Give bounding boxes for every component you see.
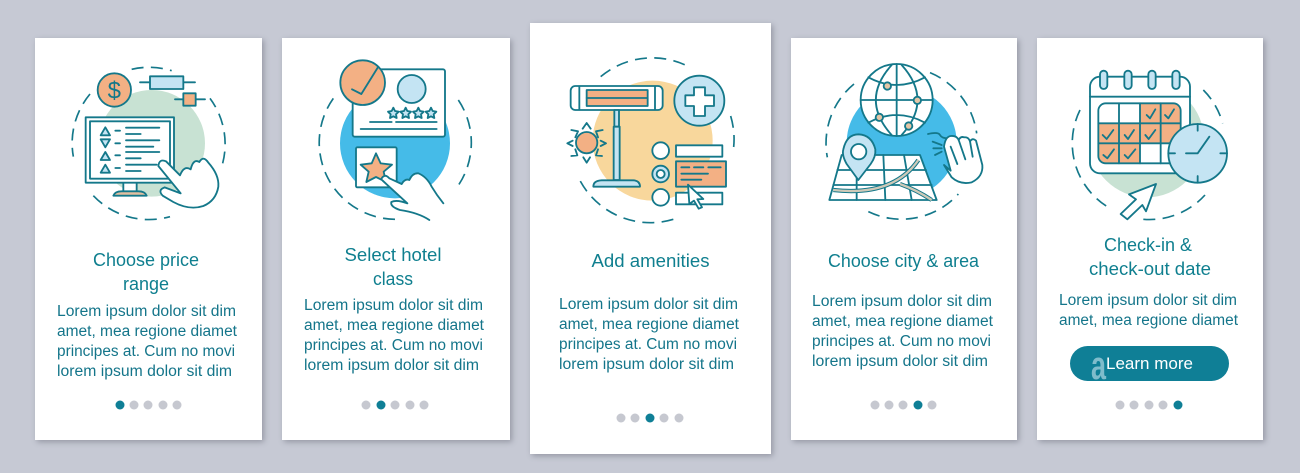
button: learn more: Learn more [1106, 354, 1193, 373]
heading: choose price range [93, 249, 199, 294]
text block: amet, mea regione diamet [1059, 312, 1239, 329]
text block: amet, mea regione diamet [57, 323, 238, 340]
icon: location pin [843, 134, 875, 180]
icon: price range monitor [72, 67, 225, 220]
text block: lorem ipsum dolor sit dim [812, 353, 988, 370]
icon: price range monitor: $ [108, 77, 121, 104]
icon: hand on mouse [928, 133, 982, 183]
pagination dots [870, 400, 936, 410]
text block: amet, mea regione diamet [812, 313, 994, 330]
text block: Lorem ipsum dolor sit dim [57, 303, 236, 320]
heading: check-in and check-out date [1089, 234, 1211, 279]
icon: globe and map [826, 64, 982, 219]
text block [812, 293, 994, 370]
heading: add amenities: Add amenities [592, 250, 710, 271]
text block [1059, 292, 1239, 329]
heading: choose price range: Choose price [93, 249, 199, 270]
text block: amet, mea regione diamet [559, 316, 740, 333]
map [829, 155, 937, 200]
panel: choose city and area [791, 38, 1017, 440]
icon: calendar and clock [1072, 71, 1227, 220]
pagination dots [616, 414, 684, 422]
calendar [1090, 71, 1190, 173]
icon: pointing hand [382, 173, 443, 221]
text block: lorem ipsum dolor sit dim [559, 356, 734, 373]
panel: add amenities [530, 23, 771, 454]
icon: cursor [688, 185, 703, 209]
text block: Lorem ipsum dolor sit dim [1059, 292, 1237, 309]
text block: principes at. Cum no movi [812, 333, 991, 350]
clock [1168, 124, 1227, 183]
icon: sun [567, 123, 606, 163]
text block [304, 297, 485, 374]
text block: lorem ipsum dolor sit dim [304, 357, 479, 374]
icon: hotel rating card [319, 60, 471, 221]
panel: choose price range [35, 38, 262, 440]
heading: select hotel class: Select hotel [344, 244, 442, 265]
pagination dots [1116, 400, 1182, 410]
text block: Lorem ipsum dolor sit dim [304, 297, 483, 314]
text block: amet, mea regione diamet [304, 317, 485, 334]
panel: check-in and check-out date [1037, 38, 1263, 440]
pagination dots [116, 400, 182, 410]
panel: select hotel class [282, 38, 510, 440]
text block: lorem ipsum dolor sit dim [57, 363, 232, 380]
text block: Lorem ipsum dolor sit dim [559, 296, 738, 313]
heading: choose price range: range [123, 273, 169, 294]
heading: choose city and area: Choose city & area [828, 250, 980, 271]
heading: check-in and check-out date: Check-in & [1104, 234, 1193, 255]
text block: Lorem ipsum dolor sit dim [812, 293, 992, 310]
text block [559, 296, 740, 373]
icon: heater and amenities [567, 58, 734, 223]
heading: select hotel class [344, 244, 442, 289]
button: learn more: a [1091, 344, 1107, 388]
button: learn more [1070, 344, 1229, 388]
heading: check-in and check-out date: check-out date [1089, 258, 1211, 279]
pagination dots [362, 400, 428, 410]
icon: cursor arrow [1121, 184, 1156, 219]
text block: principes at. Cum no movi [304, 337, 483, 354]
text block: principes at. Cum no movi [57, 343, 235, 360]
text block: principes at. Cum no movi [559, 336, 737, 353]
heading: select hotel class: class [373, 268, 413, 289]
icon: pointing hand [158, 159, 218, 208]
globe [861, 64, 933, 136]
text block [57, 303, 238, 380]
